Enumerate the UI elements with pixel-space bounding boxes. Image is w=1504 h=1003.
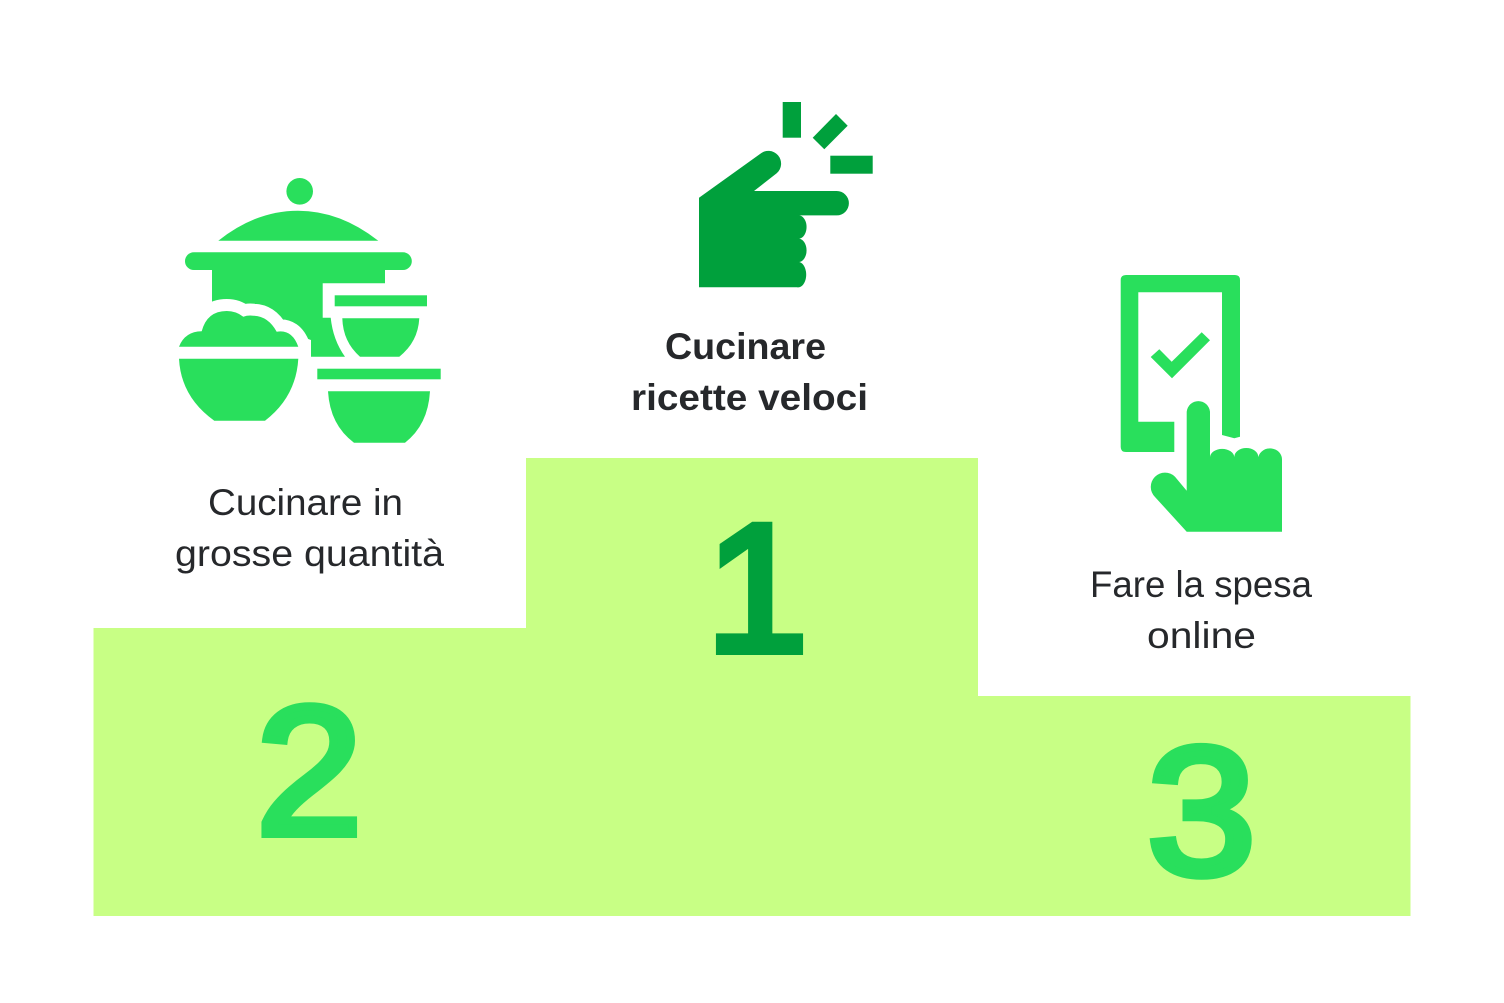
- label: Cucinare in grosse quantità: grosse quantità: [175, 533, 444, 574]
- label: Fare la spesa online: [1090, 564, 1312, 656]
- label: Cucinare ricette veloci: ricette veloci: [631, 377, 868, 418]
- label: Cucinare in grosse quantità: [175, 482, 444, 574]
- icon: finger snap: [699, 102, 873, 287]
- icon: phone with checkmark: [1121, 275, 1282, 532]
- number 1: 1: [706, 486, 808, 690]
- label: Fare la spesa online: Fare la spesa: [1090, 564, 1312, 605]
- label: Cucinare in grosse quantità: Cucinare in: [208, 482, 403, 523]
- label: Fare la spesa online: online: [1147, 615, 1256, 656]
- label: Cucinare ricette veloci: Cucinare: [665, 326, 826, 367]
- label: Cucinare ricette veloci: [631, 326, 868, 418]
- icon: pots and bowls: [179, 178, 441, 443]
- number 3: 3: [1147, 709, 1256, 913]
- podium: [94, 458, 1410, 916]
- number 2: 2: [256, 668, 362, 873]
